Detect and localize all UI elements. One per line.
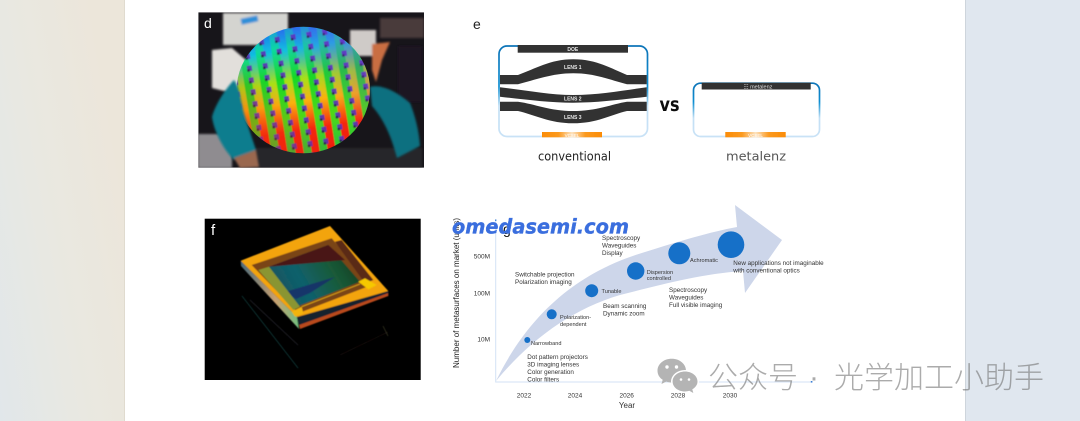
y axis ticks <box>474 253 490 343</box>
watermark: omedasemi.com: omedasemi.com <box>452 214 629 238</box>
chart labels: Spectroscopy <box>669 287 708 294</box>
y axis title: Number of metasurfaces on market (units) <box>452 218 461 368</box>
right page background <box>965 0 1080 421</box>
vs label: vs <box>660 94 680 116</box>
x axis ticks: 2022 <box>517 392 532 399</box>
chart labels: Color generation <box>527 369 574 376</box>
panel e label: e <box>473 16 481 32</box>
metalens bar: ☷ metalenz <box>744 83 773 90</box>
chart: metasurface roadmap <box>452 205 824 410</box>
chip front side <box>297 291 388 326</box>
panel letter g: g <box>503 221 511 237</box>
panel f: chip photograph <box>205 219 421 380</box>
lens 2 <box>500 87 647 103</box>
DOE bar <box>518 45 628 53</box>
chart labels: Full visible imaging <box>669 302 723 309</box>
x axis title: Year <box>619 401 635 410</box>
lens 1 <box>500 59 647 84</box>
panel d: wafer photograph <box>198 9 424 171</box>
chart labels: 3D imaging lenses <box>527 362 579 368</box>
chart labels: Waveguides <box>669 295 703 302</box>
diagram: conventional lens stack <box>499 45 648 138</box>
chart labels: Polarization imaging <box>515 279 572 286</box>
chart labels: New applications not imaginable <box>733 260 824 267</box>
VCSEL: VCSEL <box>565 133 580 138</box>
chart labels <box>515 235 824 383</box>
DOE bar: DOE <box>567 47 579 53</box>
diagram: metalenz module <box>694 83 820 138</box>
x axis ticks: 2028 <box>671 392 686 399</box>
watermark: account name: · <box>809 361 819 394</box>
watermark: account name: 公众号 <box>708 362 798 395</box>
chart labels: Dot pattern projectors <box>527 354 588 361</box>
chip top frame <box>241 226 388 317</box>
growth arrow <box>496 205 782 381</box>
chart labels: dependent <box>560 322 587 328</box>
chip surface <box>269 245 360 307</box>
panel letter d: d <box>204 15 212 31</box>
panel letter f: f <box>211 222 216 239</box>
chip left side <box>241 261 299 329</box>
page edges <box>124 0 966 421</box>
chart labels: Switchable projection <box>515 272 575 278</box>
lens 1: LENS 1 <box>564 65 582 71</box>
wafer <box>236 26 370 154</box>
chart labels: Beam scanning <box>603 303 647 310</box>
VCSEL: VCSEL <box>748 133 763 138</box>
lens 3 <box>500 102 647 123</box>
x axis ticks: 2030 <box>723 392 738 399</box>
watermark: account name: 光学加工小助手 <box>834 362 1044 395</box>
chart labels: Display <box>602 250 623 257</box>
lab equipment background <box>198 13 424 168</box>
chart labels: Color filters <box>527 376 559 383</box>
chart labels: Spectroscopy <box>602 235 641 242</box>
chip reflection <box>242 296 388 368</box>
icon: wechat logo <box>658 359 699 393</box>
chip connector strips <box>258 267 300 310</box>
chart labels: Achromatic <box>690 258 718 264</box>
y axis ticks: 100M <box>474 290 490 298</box>
chart labels: Dynamic zoom <box>603 311 645 318</box>
lens 2: LENS 2 <box>564 96 582 102</box>
x axis ticks: 2026 <box>619 392 634 399</box>
chart labels: Waveguides <box>602 243 636 250</box>
gloved hands <box>212 80 420 168</box>
VCSEL <box>542 132 602 138</box>
chart axes <box>495 220 812 383</box>
chart labels: Narrowband <box>531 341 561 347</box>
chart labels: controlled <box>647 276 671 282</box>
chart labels: Polarization- <box>560 315 591 321</box>
housing frame <box>499 46 648 136</box>
chart labels: with conventional optics <box>732 268 800 275</box>
x axis ticks <box>517 392 738 399</box>
y axis ticks: 10M <box>477 336 490 343</box>
housing frame <box>694 83 820 136</box>
chart labels: Tunable <box>602 289 622 295</box>
caption: metalenz: metalenz <box>726 148 786 164</box>
lens 3: LENS 3 <box>564 115 582 121</box>
chart labels: Dispersion <box>647 270 673 276</box>
milestone circles <box>524 231 744 343</box>
left page background <box>0 0 124 421</box>
y axis ticks: 500M <box>474 253 490 260</box>
x axis ticks: 2024 <box>568 392 583 399</box>
caption: conventional: conventional <box>538 148 611 164</box>
